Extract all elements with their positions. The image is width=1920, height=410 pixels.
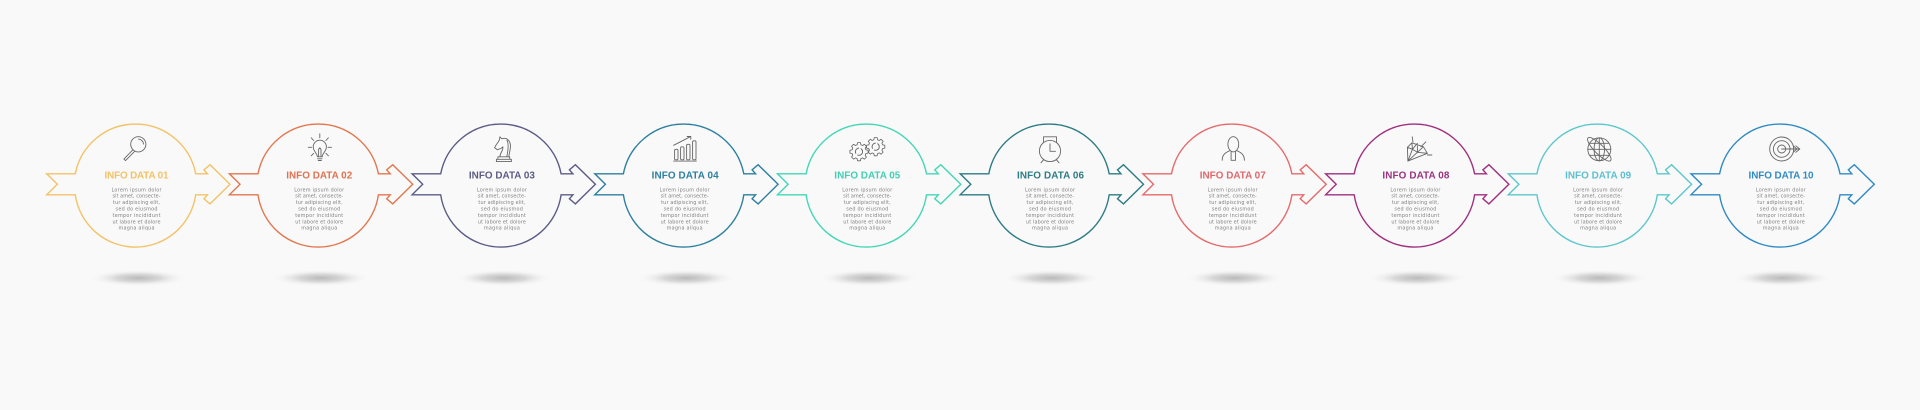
body text: Lorem ipsum dolor xyxy=(1208,187,1259,193)
body text: tur adipiscing elit, xyxy=(478,200,526,206)
body text: ut labore et dolore xyxy=(1026,219,1074,225)
heading: INFO DATA 08 xyxy=(1382,170,1450,181)
body text: sit amet, consecte- xyxy=(1574,194,1622,200)
circle arrow outline xyxy=(47,124,230,247)
shadow xyxy=(1184,270,1284,286)
heading: INFO DATA 06 xyxy=(1017,170,1084,181)
body text xyxy=(1573,187,1624,232)
step 03 xyxy=(412,124,595,286)
shadow xyxy=(636,270,736,286)
body text: tur adipiscing elit, xyxy=(1026,200,1074,206)
circle arrow outline xyxy=(1691,124,1874,247)
body text: sed do eiusmod xyxy=(1760,207,1802,213)
body text: tempor incididunt xyxy=(1757,213,1805,219)
shadow xyxy=(88,270,188,286)
body text: sed do eiusmod xyxy=(481,207,523,213)
body text: tempor incididunt xyxy=(112,213,161,219)
icon: magnifier xyxy=(124,137,146,161)
icon: chess knight xyxy=(495,137,511,162)
body text: magna aliqua xyxy=(484,226,520,232)
body text: ut labore et dolore xyxy=(843,219,891,225)
heading: INFO DATA 02 xyxy=(286,170,353,181)
body text: sed do eiusmod xyxy=(298,207,340,213)
shadow xyxy=(1002,270,1102,286)
circle arrow outline xyxy=(1326,124,1509,247)
body text: tur adipiscing elit, xyxy=(113,200,160,206)
body text: sit amet, consecte- xyxy=(1757,194,1805,200)
body text: sed do eiusmod xyxy=(664,207,706,213)
body text: tur adipiscing elit, xyxy=(296,200,343,206)
icon: gears xyxy=(850,138,885,161)
body text: Lorem ipsum dolor xyxy=(477,187,528,193)
body text xyxy=(112,187,162,232)
body text: tur adipiscing elit, xyxy=(1575,200,1622,206)
step 08 xyxy=(1326,124,1509,286)
step 02 xyxy=(229,124,413,286)
body text: sed do eiusmod xyxy=(1577,207,1619,213)
body text: magna aliqua xyxy=(849,226,885,232)
shadow xyxy=(1550,270,1650,286)
body text: sed do eiusmod xyxy=(846,207,888,213)
heading: INFO DATA 07 xyxy=(1200,170,1266,181)
body text: tempor incididunt xyxy=(1209,213,1257,219)
step 10 xyxy=(1691,124,1874,286)
body text: magna aliqua xyxy=(118,226,154,232)
body text xyxy=(1756,187,1807,232)
icon: bar chart xyxy=(674,136,696,161)
body text: sit amet, consecte- xyxy=(843,194,892,200)
heading: INFO DATA 04 xyxy=(652,170,719,181)
icon: target xyxy=(1770,137,1800,161)
step 05 xyxy=(778,124,961,286)
body text: magna aliqua xyxy=(1215,226,1251,232)
body text: sit amet, consecte- xyxy=(1391,194,1440,200)
body text xyxy=(1025,187,1076,232)
body text: ut labore et dolore xyxy=(295,219,343,225)
body text xyxy=(294,187,345,232)
body text: sed do eiusmod xyxy=(116,207,158,213)
body text: ut labore et dolore xyxy=(1757,219,1805,225)
body text: tur adipiscing elit, xyxy=(844,200,891,206)
shadow xyxy=(454,270,554,286)
body text xyxy=(1390,187,1441,232)
body text: Lorem ipsum dolor xyxy=(842,187,893,193)
body text: tur adipiscing elit, xyxy=(661,200,709,206)
circle arrow outline xyxy=(595,124,778,247)
heading: INFO DATA 03 xyxy=(469,170,535,181)
body text xyxy=(477,187,528,232)
body text: tempor incididunt xyxy=(1574,213,1622,219)
body text: tempor incididunt xyxy=(843,213,891,219)
icon: alarm clock xyxy=(1039,137,1061,163)
body text: magna aliqua xyxy=(667,226,703,232)
body text: sit amet, consecte- xyxy=(112,194,161,200)
body text: magna aliqua xyxy=(1032,226,1068,232)
body text: magna aliqua xyxy=(301,226,337,232)
step 06 xyxy=(960,124,1144,286)
heading: INFO DATA 09 xyxy=(1565,170,1632,181)
circle arrow outline xyxy=(960,124,1144,247)
icon: diamond xyxy=(1407,137,1432,161)
icon: person xyxy=(1222,137,1244,160)
icon: light bulb xyxy=(308,134,332,160)
body text: sed do eiusmod xyxy=(1029,207,1071,213)
body text: Lorem ipsum dolor xyxy=(1390,187,1441,193)
body text: Lorem ipsum dolor xyxy=(1756,187,1807,193)
step 04 xyxy=(595,124,778,286)
body text: sit amet, consecte- xyxy=(1209,194,1257,200)
body text: magna aliqua xyxy=(1580,226,1616,232)
body text: tempor incididunt xyxy=(1026,213,1074,219)
body text: Lorem ipsum dolor xyxy=(112,187,162,193)
body text xyxy=(842,187,893,232)
body text: tempor incididunt xyxy=(661,213,709,219)
body text: Lorem ipsum dolor xyxy=(1025,187,1076,193)
shadow xyxy=(819,270,919,286)
body text: ut labore et dolore xyxy=(661,219,709,225)
body text: Lorem ipsum dolor xyxy=(294,187,345,193)
body text: ut labore et dolore xyxy=(1209,219,1257,225)
icon: globe xyxy=(1585,135,1614,164)
step 09 xyxy=(1508,124,1692,286)
body text: Lorem ipsum dolor xyxy=(1573,187,1624,193)
shadow xyxy=(1732,270,1832,286)
body text: ut labore et dolore xyxy=(478,219,526,225)
body text: sed do eiusmod xyxy=(1394,207,1436,213)
body text: magna aliqua xyxy=(1763,226,1799,232)
body text: sit amet, consecte- xyxy=(295,194,343,200)
body text xyxy=(660,187,711,232)
body text: tempor incididunt xyxy=(1391,213,1439,219)
shadow xyxy=(1367,270,1467,286)
body text: tur adipiscing elit, xyxy=(1209,200,1257,206)
body text: magna aliqua xyxy=(1397,226,1433,232)
body text: tempor incididunt xyxy=(295,213,343,219)
body text: sit amet, consecte- xyxy=(1026,194,1074,200)
circle arrow outline xyxy=(778,124,961,247)
body text xyxy=(1208,187,1259,232)
body text: ut labore et dolore xyxy=(1574,219,1622,225)
body text: tur adipiscing elit, xyxy=(1757,200,1805,206)
heading: INFO DATA 10 xyxy=(1749,170,1814,181)
body text: Lorem ipsum dolor xyxy=(660,187,711,193)
heading: INFO DATA 05 xyxy=(834,170,901,181)
body text: ut labore et dolore xyxy=(1391,219,1439,225)
heading: INFO DATA 01 xyxy=(104,170,169,181)
body text: sit amet, consecte- xyxy=(478,194,526,200)
body text: sit amet, consecte- xyxy=(661,194,709,200)
body text: tur adipiscing elit, xyxy=(1392,200,1439,206)
step 07 xyxy=(1143,124,1326,286)
circle arrow outline xyxy=(1508,124,1692,247)
circle arrow outline xyxy=(412,124,595,247)
body text: ut labore et dolore xyxy=(112,219,160,225)
shadow xyxy=(271,270,371,286)
circle arrow outline xyxy=(229,124,413,247)
body text: tempor incididunt xyxy=(478,213,526,219)
body text: sed do eiusmod xyxy=(1212,207,1254,213)
step 01 xyxy=(47,124,230,286)
circle arrow outline xyxy=(1143,124,1326,247)
